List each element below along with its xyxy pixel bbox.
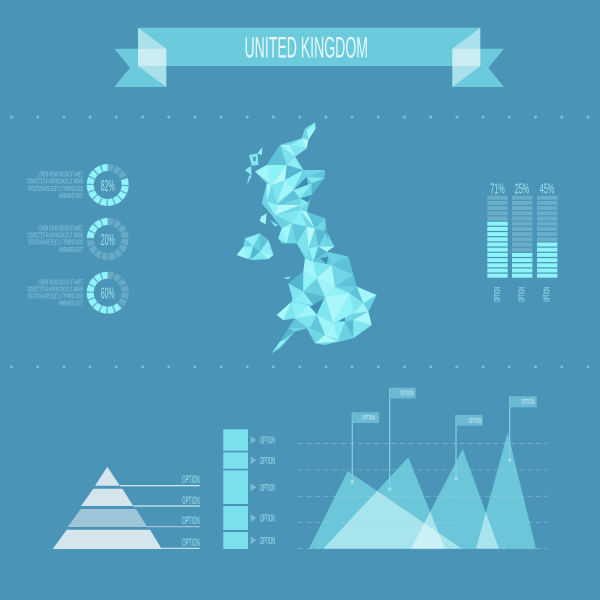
bar percentages [490, 180, 554, 198]
bar column 45% [537, 196, 557, 278]
bar column background rows and filled rows, 71% [487, 196, 508, 278]
panel: donut stats [27, 168, 125, 310]
triangle 1 [309, 471, 462, 549]
column arrows [251, 436, 256, 544]
donut 60%: 60% [101, 286, 115, 303]
donut 60% [90, 275, 125, 310]
donut 20%: 20% [101, 232, 115, 249]
text: OPTION [182, 495, 200, 507]
ribbon main band [138, 28, 480, 66]
text: OPTION [260, 435, 275, 447]
overlap 1 and 2 [324, 491, 424, 549]
left fold highlight [138, 49, 166, 66]
panel: donut stats: HIMENAEOS EGET [59, 245, 83, 254]
flag 2 [388, 388, 416, 491]
pyramid leader lines [120, 486, 200, 548]
flag 3 [454, 415, 483, 480]
pyramid chart [53, 467, 200, 549]
left fold [138, 28, 166, 87]
ribbon right tail [452, 49, 504, 87]
mainland facets [255, 122, 377, 353]
text block 1 [27, 170, 83, 200]
column labels [260, 435, 275, 547]
right fold [452, 28, 480, 87]
mainland silhouette [255, 122, 377, 353]
bar percentages: 71% [490, 180, 505, 198]
panel: donut stats: HIMENAEOS EGET [59, 191, 83, 200]
text: OPTION [182, 515, 200, 527]
donut 82%: 82% [101, 178, 115, 195]
text: OPTION [182, 537, 200, 549]
islands: Hebrides [245, 147, 291, 279]
text: OPTION [260, 535, 275, 547]
panel: donut stats: LOREM IPSUM DOLOR SIT AMET, [38, 278, 83, 286]
panel: donut stats: EFFICITUR ANTE EGET, UT TEMPOR ODIO [28, 292, 83, 300]
text: OPTION [182, 474, 200, 486]
pyramid band 2 [81, 489, 133, 506]
pyramid band 4 [53, 530, 162, 549]
bar column 25% [512, 196, 532, 278]
panel: stacked percentage bars: OPTION [518, 287, 526, 302]
panel: stacked percentage bars: OPTION [542, 287, 552, 302]
panel: donut stats: HIMENAEOS EGET [59, 298, 83, 308]
panel: stacked percentage bars: OPTION [493, 287, 502, 302]
pyramid labels [182, 474, 200, 549]
text: OPTION [260, 455, 275, 467]
panel: donut stats: LOREM IPSUM DOLOR SIT AMET, [38, 224, 83, 232]
overlap 3 and 4 [476, 512, 499, 549]
panel: donut stats: LOREM IPSUM DOLOR SIT AMET, [38, 170, 83, 178]
text block 2 [27, 224, 83, 254]
flag 2: OPTION [400, 390, 414, 398]
overlap 2 and 3 [424, 512, 439, 533]
panel: donut stats: EFFICITUR ANTE EGET, UT TEMPOR ODIO [28, 238, 83, 246]
donut 82% [90, 168, 125, 202]
panel: donut stats: CONSECTETUR ADIPISCING ELIT, MORBI [27, 284, 83, 294]
flag 1: OPTION [362, 415, 375, 422]
panel: stacked percentage bars: 45% [540, 180, 554, 198]
right fold highlight [452, 49, 480, 66]
donut 20% [90, 222, 125, 256]
triangle 3 [411, 449, 499, 549]
pyramid band 3 [68, 509, 147, 527]
ribbon banner with title: UNITED KINGDOM [244, 32, 368, 64]
flag 3: OPTION [468, 418, 482, 425]
panel: donut stats: CONSECTETUR ADIPISCING ELIT, MORBI [27, 230, 83, 240]
flag 4: OPTION [522, 399, 534, 406]
bar percentages: 25% [515, 180, 529, 198]
overlap 1 and 3 [439, 533, 461, 549]
panel: stacked percentage bars [487, 180, 557, 302]
text block 3 [27, 278, 83, 308]
flag 1 [351, 412, 379, 483]
triple overlap [411, 523, 445, 548]
ribbon left tail [114, 49, 166, 87]
segmented column with options [223, 429, 275, 549]
low-poly map of the United Kingdom [237, 122, 377, 353]
triangle 2 [323, 457, 445, 549]
pyramid band 1 [95, 467, 120, 486]
text: OPTION [260, 513, 275, 525]
bar option labels [493, 287, 552, 302]
triangle area chart with flags [298, 388, 548, 549]
panel: donut stats: CONSECTETUR ADIPISCING ELIT, MORBI [27, 176, 83, 186]
ribbon banner with title [114, 28, 504, 87]
text: OPTION [260, 482, 275, 494]
flag 4 [508, 396, 537, 462]
column segments [223, 429, 248, 549]
island: Northern Ireland [237, 233, 273, 260]
triangle 4 [476, 433, 536, 549]
panel: donut stats: EFFICITUR ANTE EGET, UT TEMPOR ODIO [28, 184, 83, 193]
